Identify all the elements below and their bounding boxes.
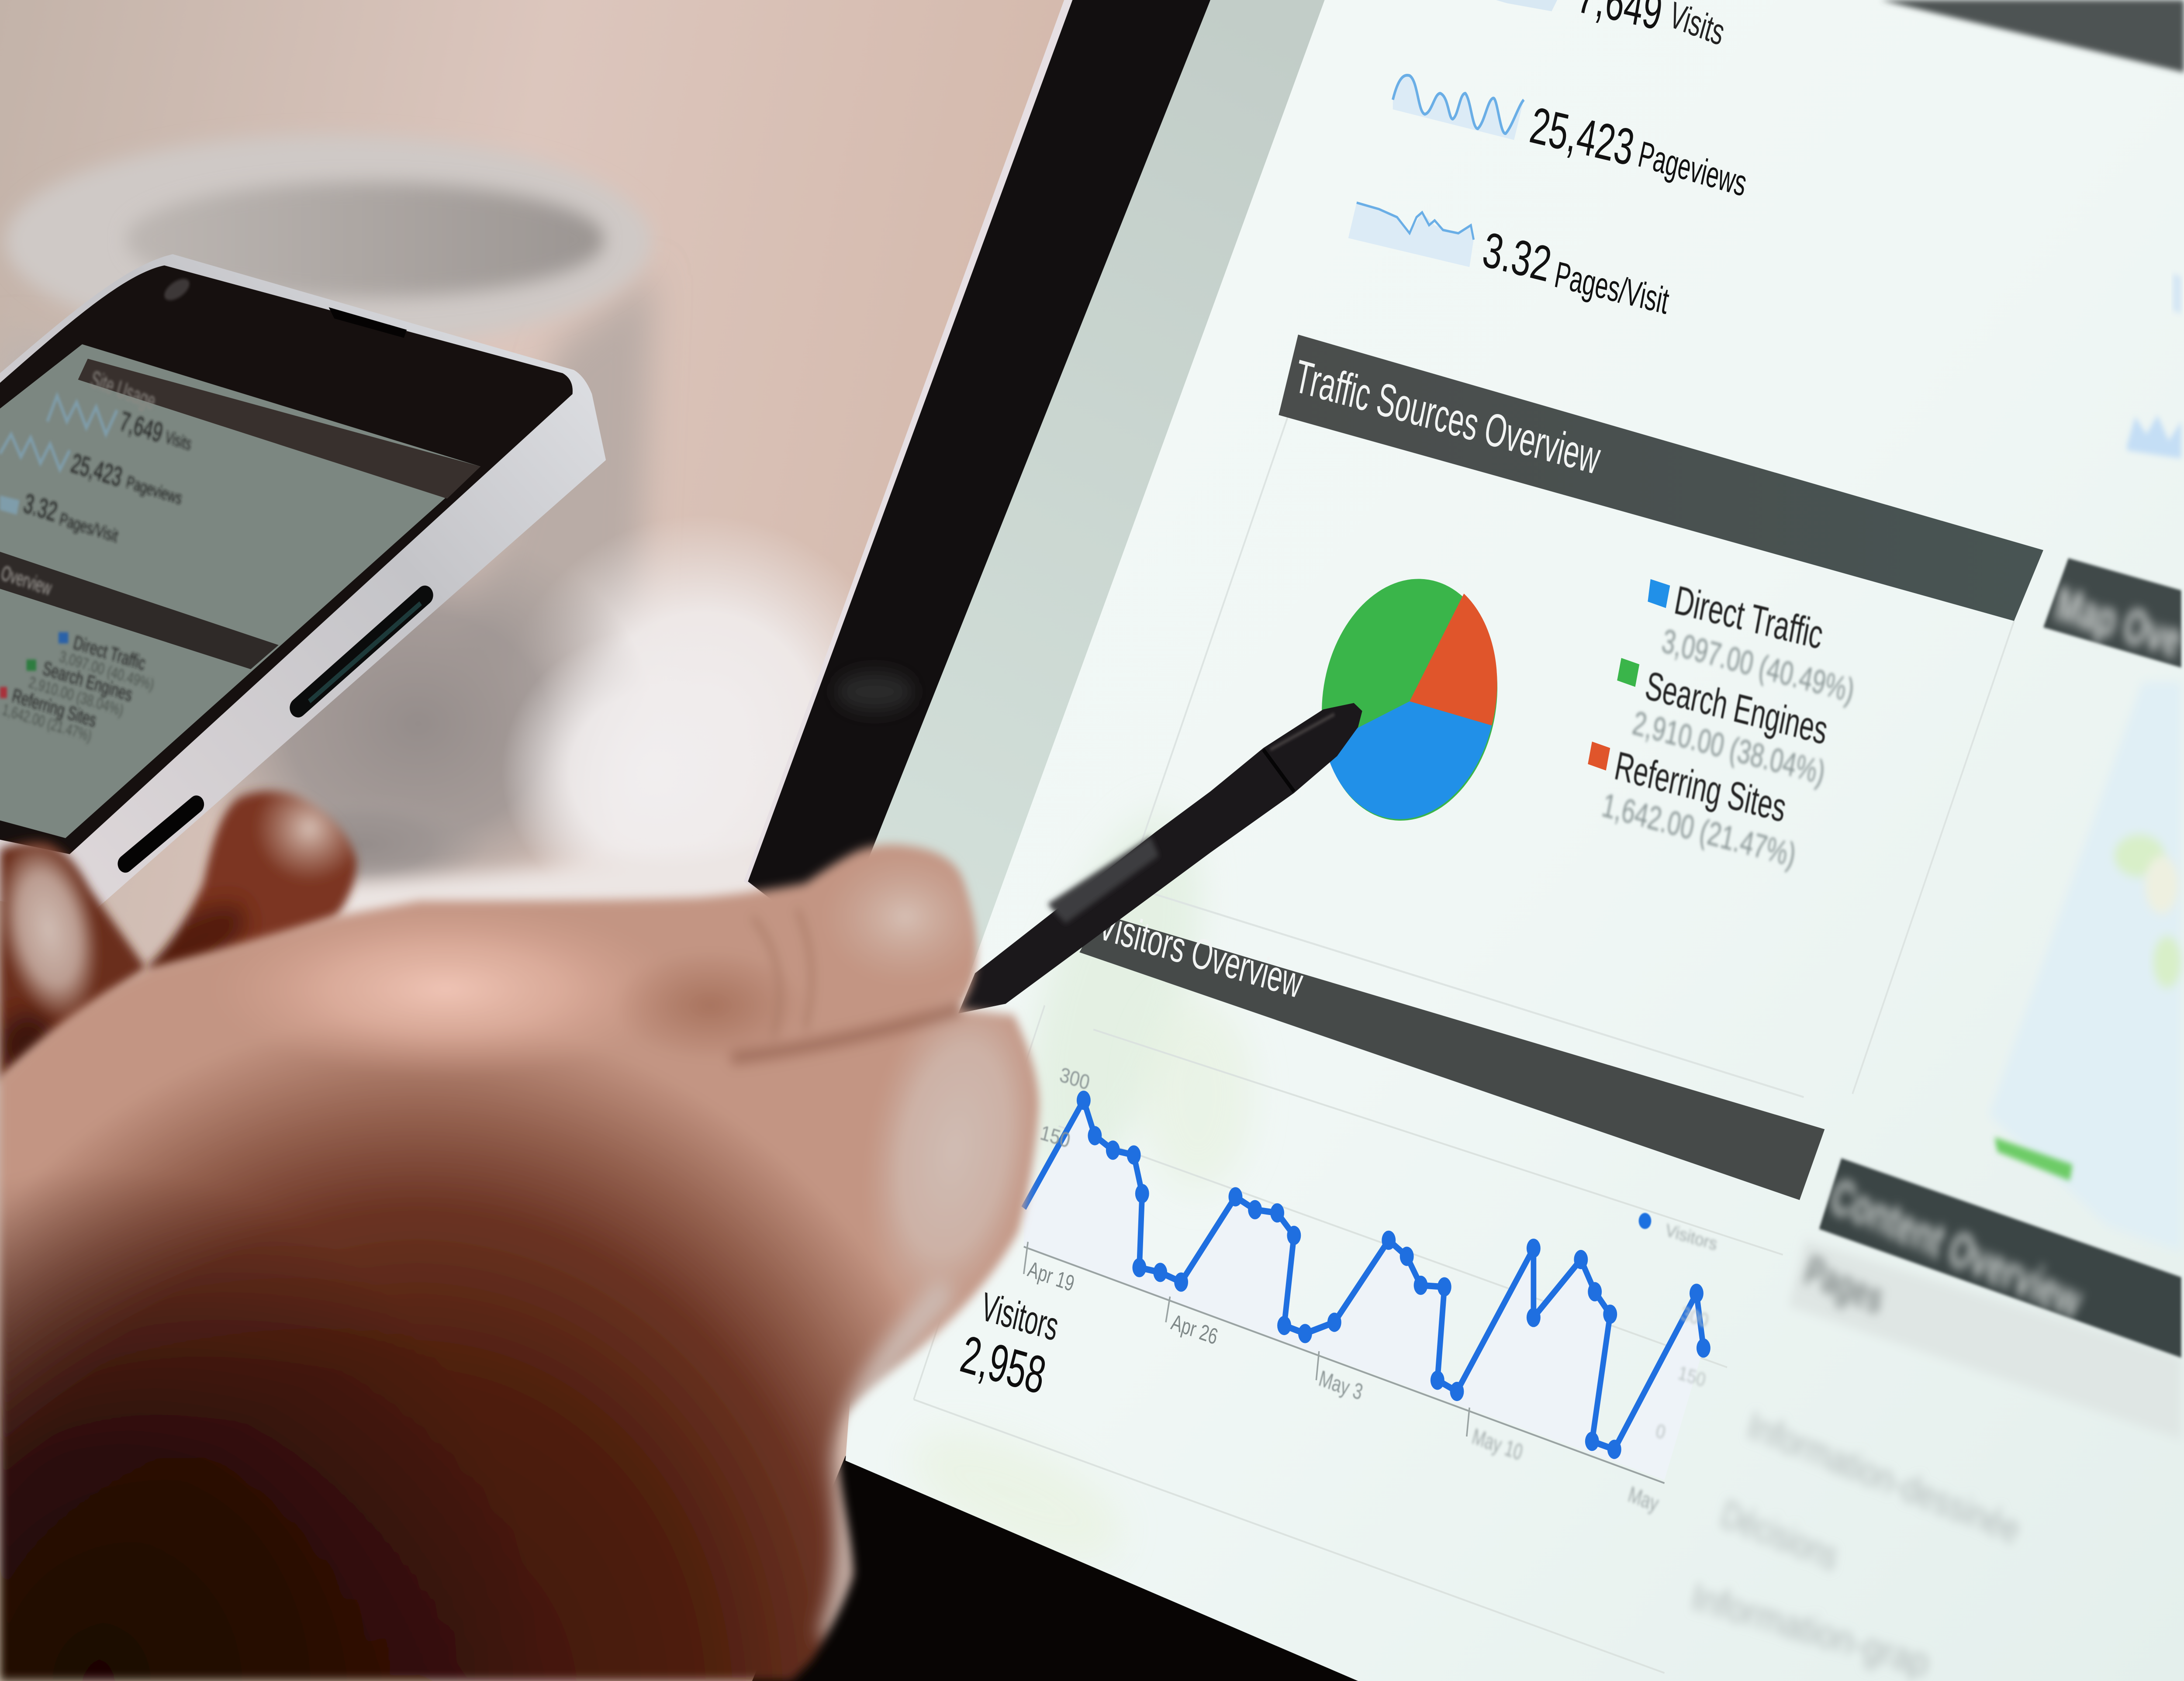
- highlight: thumb: [822, 849, 989, 984]
- phone section band: [0, 552, 279, 669]
- pen highlight: [1270, 714, 1334, 749]
- phone speaker: [329, 307, 407, 338]
- phone white body: [0, 254, 606, 920]
- line chart: [1024, 1063, 1719, 1517]
- plate glare: [494, 515, 912, 949]
- pages label: Pages: [1800, 1246, 1890, 1322]
- visitors panel frame: [914, 1005, 1783, 1673]
- sparkline: visits: [1496, 0, 1557, 11]
- legend: direct traffic: 3,097.00 (40.49%): [1659, 622, 1857, 710]
- chart x axis labels: Apr 26: [1169, 1309, 1220, 1350]
- blurred page rows: [1688, 1403, 2025, 1681]
- bezel pale edge: [744, 0, 1074, 888]
- cup body: [460, 273, 655, 659]
- phone screen text: 3.32: [21, 488, 60, 528]
- chart right axis labels: 150: [1676, 1362, 1708, 1391]
- chart x axis labels: [1025, 1256, 1662, 1517]
- phone screen text: 25,423: [68, 448, 125, 493]
- phone screen text: 2,910.00 (38.04%): [27, 673, 125, 720]
- traffic sources header band: [1279, 335, 2043, 621]
- chart x axis labels: May 3: [1317, 1366, 1365, 1405]
- sparkline: pages per visit: [1348, 203, 1474, 267]
- pen ring: [1263, 749, 1294, 791]
- number: pages per visit: [1479, 221, 1672, 322]
- legend: search engines: 2,910.00 (38.04%): [1630, 704, 1828, 792]
- number: visits: [1573, 0, 1729, 53]
- shade: thumb base: [613, 949, 808, 1062]
- panel: content overview: [1688, 1158, 2181, 1681]
- pie legend: [1588, 578, 1857, 874]
- sparkline: far right: [2127, 415, 2181, 459]
- content header band: [1819, 1158, 2181, 1358]
- visitors total: 2,958: [956, 1324, 1051, 1405]
- cup rim: [6, 135, 652, 348]
- thumb crease: [731, 1008, 961, 1059]
- cup interior: [125, 182, 605, 297]
- tablet screen: [836, 0, 2184, 1681]
- tablet bezel: [744, 0, 1372, 1681]
- legend: direct traffic: [1648, 578, 1857, 710]
- blurred page rows: Information-dessinée: [1743, 1403, 2025, 1552]
- number: pageviews: [1526, 96, 1750, 204]
- phone screen text: 7,649: [117, 406, 166, 448]
- table shadow: [181, 523, 655, 925]
- chart right axis labels: [1654, 1302, 1711, 1443]
- legend: referring sites: Referring Sites: [1611, 743, 1790, 831]
- panel frame lines: [1114, 415, 2014, 1097]
- legend: referring sites: [1588, 742, 1799, 874]
- chart y axis labels: [1038, 1063, 1092, 1153]
- phone screen text: Visits: [163, 428, 194, 454]
- visitors total: Visitors: [977, 1284, 1062, 1350]
- legend: direct traffic: Direct Traffic: [1671, 578, 1826, 658]
- phone screen text: Referring Sites: [10, 685, 98, 731]
- visitors heading: Visitors Overview: [1094, 900, 1307, 1008]
- highlight: knuckle: [209, 901, 683, 1078]
- number: pages per visit: Pages/Visit: [1552, 253, 1672, 322]
- map header band: [2043, 558, 2181, 668]
- chart right axis labels: 0: [1654, 1420, 1668, 1443]
- phone screen text: Pages/Visit: [58, 510, 120, 546]
- hand base skin: [0, 836, 1045, 1681]
- phone volume button: [298, 595, 425, 708]
- phone screen text: Site Usage: [88, 365, 159, 415]
- panel: visitors overview: [914, 900, 1825, 1673]
- ring finger behind phone: [0, 825, 153, 1086]
- knuckle wrinkles: [752, 909, 812, 1038]
- map scale legend: [1994, 1137, 2073, 1181]
- bezel reflection: [836, 673, 914, 711]
- main hand and thumb: [0, 836, 1071, 1681]
- index finger on phone: [135, 774, 365, 991]
- phone screen text: Pageviews: [124, 473, 184, 508]
- hand holding pen and phone: [0, 774, 1071, 1681]
- phone screen text: 3,097.00 (40.49%): [58, 648, 156, 694]
- blurred page rows: Décisions: [1717, 1492, 1843, 1578]
- phone screen text: [0, 365, 194, 746]
- map land: [2115, 835, 2164, 877]
- phone side button: [125, 804, 197, 864]
- phone header band: [78, 359, 480, 499]
- phone screen: [0, 344, 480, 838]
- chart axis: [1024, 1242, 1665, 1483]
- screen grey edge strip: [836, 0, 1325, 998]
- content heading: Content Overview: [1824, 1167, 2089, 1329]
- shadow: lower left corner: [0, 1166, 543, 1681]
- screen white background: [846, 0, 2184, 1681]
- pages light band: [1788, 1240, 2181, 1440]
- number: pageviews: 25,423: [1526, 96, 1638, 176]
- site usage metrics: [1348, 0, 2181, 459]
- phone: [0, 254, 606, 920]
- phone screen text: Search Engines: [41, 657, 135, 705]
- number: pageviews: Pageviews: [1635, 133, 1750, 204]
- visitors total: [956, 1284, 1062, 1405]
- chart legend: Visitors: [1664, 1221, 1719, 1254]
- chart area fill: [1024, 1100, 1704, 1480]
- pie chart: [1299, 556, 1521, 844]
- chart y axis labels: 300: [1057, 1063, 1092, 1094]
- screen tint: [898, 788, 1254, 1585]
- pale side of hand: [838, 956, 1071, 1344]
- phone screen text: Overview: [0, 561, 54, 600]
- chart x axis labels: May: [1625, 1482, 1662, 1517]
- top right dark band: [1880, 0, 2184, 72]
- chart x axis labels: May 10: [1469, 1424, 1525, 1465]
- phone screen text: 1,642.00 (21.47%): [0, 701, 93, 746]
- chart legend: [1639, 1213, 1719, 1254]
- traffic sources heading: Traffic Sources Overview: [1290, 350, 1605, 484]
- panel: traffic sources overview: [1114, 335, 2043, 1097]
- pen grip: [1047, 836, 1159, 923]
- panel: map overview: [1989, 558, 2184, 1252]
- phone camera: [161, 275, 193, 304]
- bezel bottom black: [752, 1456, 1372, 1681]
- phone screen text: Direct Traffic: [72, 632, 148, 674]
- stylus pen: [958, 703, 1362, 1013]
- chart x axis labels: Apr 19: [1025, 1256, 1077, 1297]
- phone black face: [0, 266, 573, 854]
- chart right axis labels: 300: [1679, 1302, 1711, 1332]
- legend: referring sites: 1,642.00 (21.47%): [1599, 787, 1799, 874]
- sparkline: pageviews: [1393, 75, 1524, 140]
- legend: search engines: [1617, 658, 1831, 792]
- chart points: [1077, 1091, 1711, 1459]
- visitors header band: [1079, 914, 1825, 1200]
- legend: search engines: Search Engines: [1642, 663, 1831, 753]
- number: pages per visit: 3.32: [1479, 221, 1555, 292]
- map area: [1989, 682, 2181, 1252]
- bezel left black: [748, 0, 1213, 949]
- chart line: [1024, 1100, 1704, 1450]
- chart y axis labels: 150: [1038, 1121, 1072, 1153]
